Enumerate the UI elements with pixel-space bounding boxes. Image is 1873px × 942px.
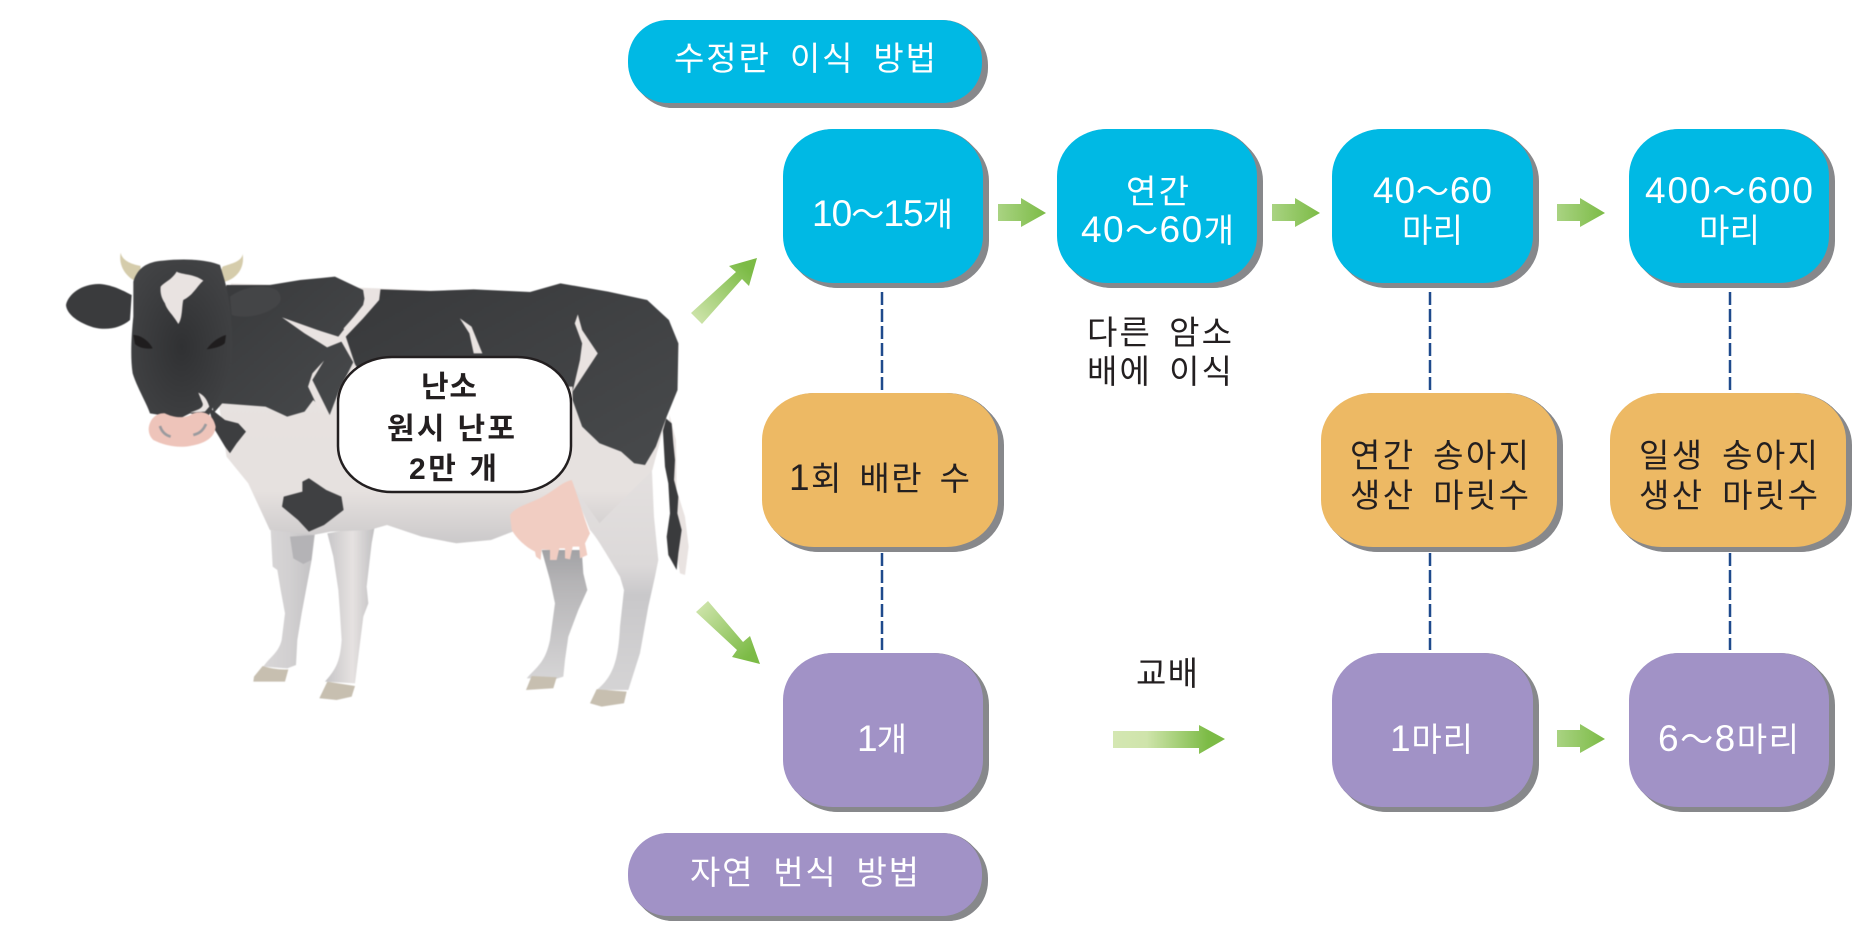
box: 1 egg xyxy=(783,653,983,807)
box: annually 40-60 eggs xyxy=(1057,129,1257,283)
arrow: natural head to lifetime head xyxy=(1557,724,1605,753)
box: calves per year: 생산 마릿수 xyxy=(1350,477,1529,514)
coat cracks xyxy=(282,289,598,415)
box: 6-8 head: 6～8마리 xyxy=(1658,718,1799,759)
black patch: back and rump xyxy=(344,283,678,465)
forehead blaze xyxy=(161,272,203,324)
box: annually 40-60 eggs: 연간 xyxy=(1126,173,1189,210)
label: transfer to other cows: 배에 이식 xyxy=(1087,353,1232,390)
callout: ovary and primordial follicles: 원시 난포 xyxy=(387,413,515,446)
black spot: shoulder xyxy=(282,478,344,532)
arrow: annual eggs to head xyxy=(1272,198,1320,227)
box: 400-600 head: 마리 xyxy=(1699,212,1760,249)
label: transfer to other cows xyxy=(1087,314,1232,390)
box: eggs per ovulation xyxy=(762,393,998,547)
box: eggs per ovulation: 1회 배란 수 xyxy=(789,457,970,498)
heading pill: natural breeding method xyxy=(628,833,982,916)
illustration: Holstein cow xyxy=(66,253,689,707)
muzzle xyxy=(149,412,216,447)
dashed connectors xyxy=(882,292,1730,650)
box: 400-600 head: 400～600 xyxy=(1645,170,1813,211)
body xyxy=(218,283,678,543)
arrow: cow to 10-15 eggs xyxy=(691,258,757,324)
box: calves per year: 연간 송아지 xyxy=(1350,437,1529,474)
face xyxy=(131,259,232,418)
ear: right xyxy=(230,287,281,317)
box: 40-60 head xyxy=(1332,129,1533,283)
ear: left xyxy=(66,284,132,329)
near rear leg xyxy=(568,440,658,707)
heading pill: embryo transfer method: 수정란 이식 방법 xyxy=(674,40,936,77)
arrow: head to lifetime head xyxy=(1557,198,1605,227)
callout: ovary and primordial follicles xyxy=(338,357,571,492)
box: 6-8 head xyxy=(1629,653,1829,807)
udder xyxy=(510,480,590,560)
box: calves per lifetime: 생산 마릿수 xyxy=(1639,477,1818,514)
box: 1 egg: 1개 xyxy=(857,718,907,759)
nostrils xyxy=(160,424,206,437)
box: calves per year xyxy=(1321,393,1557,547)
horn: left xyxy=(120,253,141,280)
chest patch xyxy=(208,407,246,453)
horn: right xyxy=(221,254,243,282)
box: 40-60 head: 마리 xyxy=(1402,212,1463,249)
box: 10-15 eggs: 10～15개 xyxy=(812,193,953,234)
callout: ovary and primordial follicles: 2만 개 xyxy=(409,453,497,486)
box: calves per lifetime: 일생 송아지 xyxy=(1639,437,1818,474)
callout: ovary and primordial follicles: 난소 xyxy=(421,371,477,404)
cow head xyxy=(66,253,281,453)
eye: left xyxy=(133,335,153,349)
label: mating: 교배 xyxy=(1136,655,1198,692)
heading pill: natural breeding method: 자연 번식 방법 xyxy=(690,854,919,891)
box: 10-15 eggs xyxy=(783,129,983,283)
box: 40-60 head: 40～60 xyxy=(1373,170,1492,211)
box: calves per lifetime xyxy=(1610,393,1846,547)
near front leg xyxy=(319,525,375,700)
far rear leg xyxy=(526,550,587,690)
heading pill: embryo transfer method xyxy=(628,20,982,103)
black patch: neck and shoulder xyxy=(207,277,365,417)
eye: right xyxy=(207,335,226,349)
box: annually 40-60 eggs: 40～60개 xyxy=(1081,209,1234,250)
label: transfer to other cows: 다른 암소 xyxy=(1087,314,1232,351)
arrow: cow to 1 egg xyxy=(696,601,760,664)
tail xyxy=(662,413,689,575)
neck marking xyxy=(190,393,209,413)
box: 1 head xyxy=(1332,653,1533,807)
box: 1 head: 1마리 xyxy=(1390,718,1473,759)
box: 400-600 head xyxy=(1629,129,1829,283)
arrow: mating xyxy=(1113,725,1225,754)
far front leg xyxy=(253,530,315,682)
arrow: eggs to annual eggs xyxy=(998,198,1046,227)
